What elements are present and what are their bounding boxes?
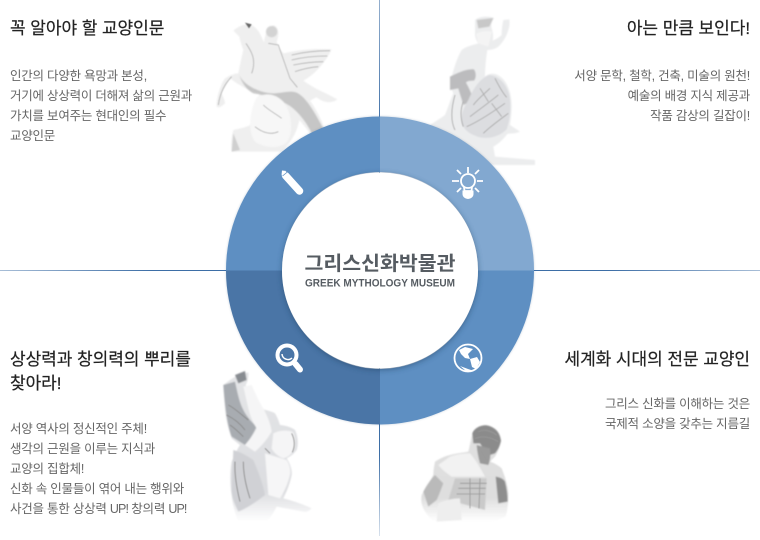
heading: bottom left: 찾아라!: [10, 374, 61, 393]
body text: top right: [574, 69, 750, 123]
icon: magnifier: [278, 346, 300, 370]
icon: light bulb: [452, 167, 483, 198]
body text: top left: 인간의 다양한 욕망과 본성,: [10, 69, 147, 83]
ring segment: bottom left: [226, 270, 380, 424]
heading: top left: 꼭 알아야 할 교양인문: [10, 19, 164, 38]
body text: top left: 교양인문: [10, 129, 55, 143]
body text: top right: 작품 감상의 길잡이!: [650, 109, 750, 123]
center circle: [282, 172, 478, 368]
body text: bottom right: 국제적 소양을 갖추는 지름길: [605, 417, 750, 431]
body text: top right: 서양 문학, 철학, 건축, 미술의 원천!: [574, 69, 750, 83]
body text: top left: [10, 69, 192, 143]
logo: museum name: [304, 253, 456, 290]
icon: globe: [454, 344, 482, 372]
statue: warrior with lion: [430, 17, 535, 165]
statue: Hercules torso: [421, 425, 508, 522]
statue: embracing figures: [223, 371, 312, 522]
panel: bottom left text: [10, 350, 191, 516]
heading: top right: 아는 만큼 보인다!: [627, 19, 750, 38]
body text: bottom right: [605, 397, 750, 431]
heading: bottom right: 세계화 시대의 전문 교양인: [564, 350, 750, 369]
body text: bottom left: 교양의 집합체!: [10, 462, 84, 476]
body text: top left: 가치를 보여주는 현대인의 필수: [10, 109, 166, 123]
logo: museum name: GREEK MYTHOLOGY MUSEUM: [305, 278, 455, 290]
panel: top right text: [574, 19, 750, 123]
heading: bottom left: 상상력과 창의력의 뿌리를: [10, 350, 191, 369]
icon: pencil: [282, 170, 300, 191]
ring segment: top left: [226, 116, 380, 270]
ring segment: bottom right: [380, 270, 534, 424]
body text: bottom left: 생각의 근원을 이루는 지식과: [10, 442, 155, 456]
logo: museum name: 그리스신화박물관: [304, 253, 456, 275]
body text: bottom left: 신화 속 인물들이 엮어 내는 행위와: [10, 482, 184, 496]
ring segment: top right: [380, 116, 534, 270]
body text: bottom left: [10, 422, 186, 516]
panel: top left text: [10, 19, 192, 143]
body text: top right: 예술의 배경 지식 제공과: [628, 89, 750, 103]
heading: bottom left: [10, 350, 191, 393]
body text: bottom right: 그리스 신화를 이해하는 것은: [605, 397, 750, 411]
body text: bottom left: 서양 역사의 정신적인 주체!: [10, 422, 147, 436]
panel: bottom right text: [564, 350, 750, 431]
body text: bottom left: 사건을 통한 상상력 UP! 창의력 UP!: [10, 502, 186, 516]
body text: top left: 거기에 상상력이 더해져 삶의 근원과: [10, 89, 192, 103]
statue: Pegasus and rider: [217, 23, 337, 152]
ring diagram: [226, 116, 534, 425]
